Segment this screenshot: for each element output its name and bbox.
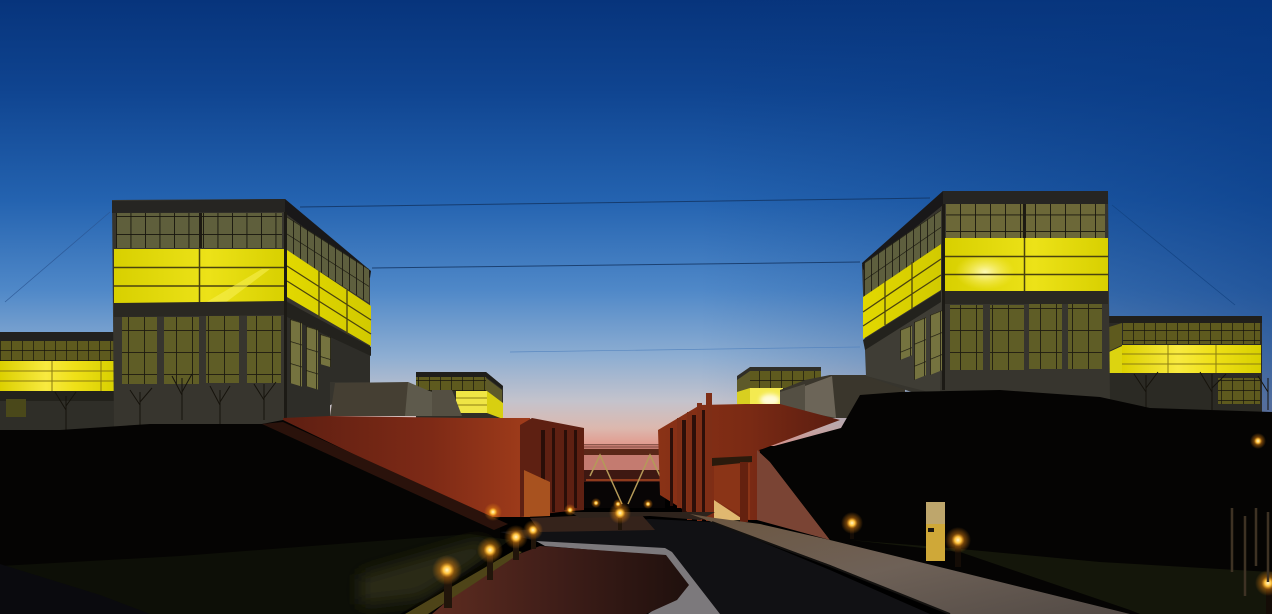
far plaza [530, 513, 655, 532]
upper windows front [946, 204, 1105, 238]
concrete strip [945, 291, 1108, 304]
red wall: right pavilion [658, 393, 840, 522]
dark embankment left [0, 420, 500, 614]
yellow band front [114, 249, 285, 303]
lamp [523, 520, 543, 549]
concrete strip [114, 301, 285, 317]
concrete block right [780, 375, 905, 418]
lamp [504, 525, 528, 560]
yellow band front [945, 238, 1108, 291]
dark embankment right [759, 390, 1272, 614]
sign post [926, 502, 945, 561]
bare trees in front of buildings [55, 372, 1268, 430]
overhead cables [5, 198, 1235, 352]
ramp edge left [262, 422, 508, 530]
lower windows side [290, 319, 331, 390]
lawn glow left [360, 540, 495, 605]
lamp [609, 502, 631, 530]
lamp [484, 503, 502, 521]
lower windows front [122, 316, 281, 384]
corner column [284, 212, 287, 428]
upper windows side [286, 216, 369, 303]
upper windows front [116, 213, 282, 248]
upper windows side [864, 210, 941, 297]
lamp [564, 498, 653, 516]
concrete block left [330, 382, 462, 416]
base and lower wall [112, 199, 370, 428]
path far left [0, 564, 150, 614]
lawn left [0, 534, 510, 614]
yellow band side [287, 250, 371, 346]
lamp [477, 537, 503, 580]
walls [862, 191, 1110, 402]
kerb on plaza left [405, 550, 522, 614]
yellow band side [863, 244, 941, 339]
foreground sapling stakes [1232, 508, 1268, 596]
building: large left block [112, 199, 371, 428]
concrete ramp wedge [757, 450, 830, 540]
roof fascia [943, 191, 1108, 204]
far bridge and horizon [575, 444, 665, 508]
sidewalk right [690, 514, 1130, 614]
lower windows side [900, 310, 942, 380]
corner column [942, 204, 945, 390]
building: centre-right small block [737, 367, 821, 406]
building: large right block [862, 191, 1110, 402]
lawn right [850, 540, 1272, 614]
ground lamps with glow [432, 433, 1272, 614]
dusk sky [0, 0, 1272, 446]
red wall: left pavilion [283, 416, 584, 517]
red brick plaza [432, 546, 689, 614]
roof fascia [112, 199, 285, 213]
building: centre-left small block [416, 372, 503, 420]
white island curb [536, 541, 720, 614]
road [500, 519, 930, 614]
building: far right small block [1109, 316, 1262, 412]
lamp [432, 555, 462, 608]
lamp [945, 527, 971, 567]
building: far left small block [0, 332, 115, 432]
lamp [1250, 433, 1266, 449]
lower windows front [950, 304, 1102, 370]
lamp [841, 512, 863, 539]
far path [570, 512, 715, 520]
lamp [1255, 570, 1272, 614]
